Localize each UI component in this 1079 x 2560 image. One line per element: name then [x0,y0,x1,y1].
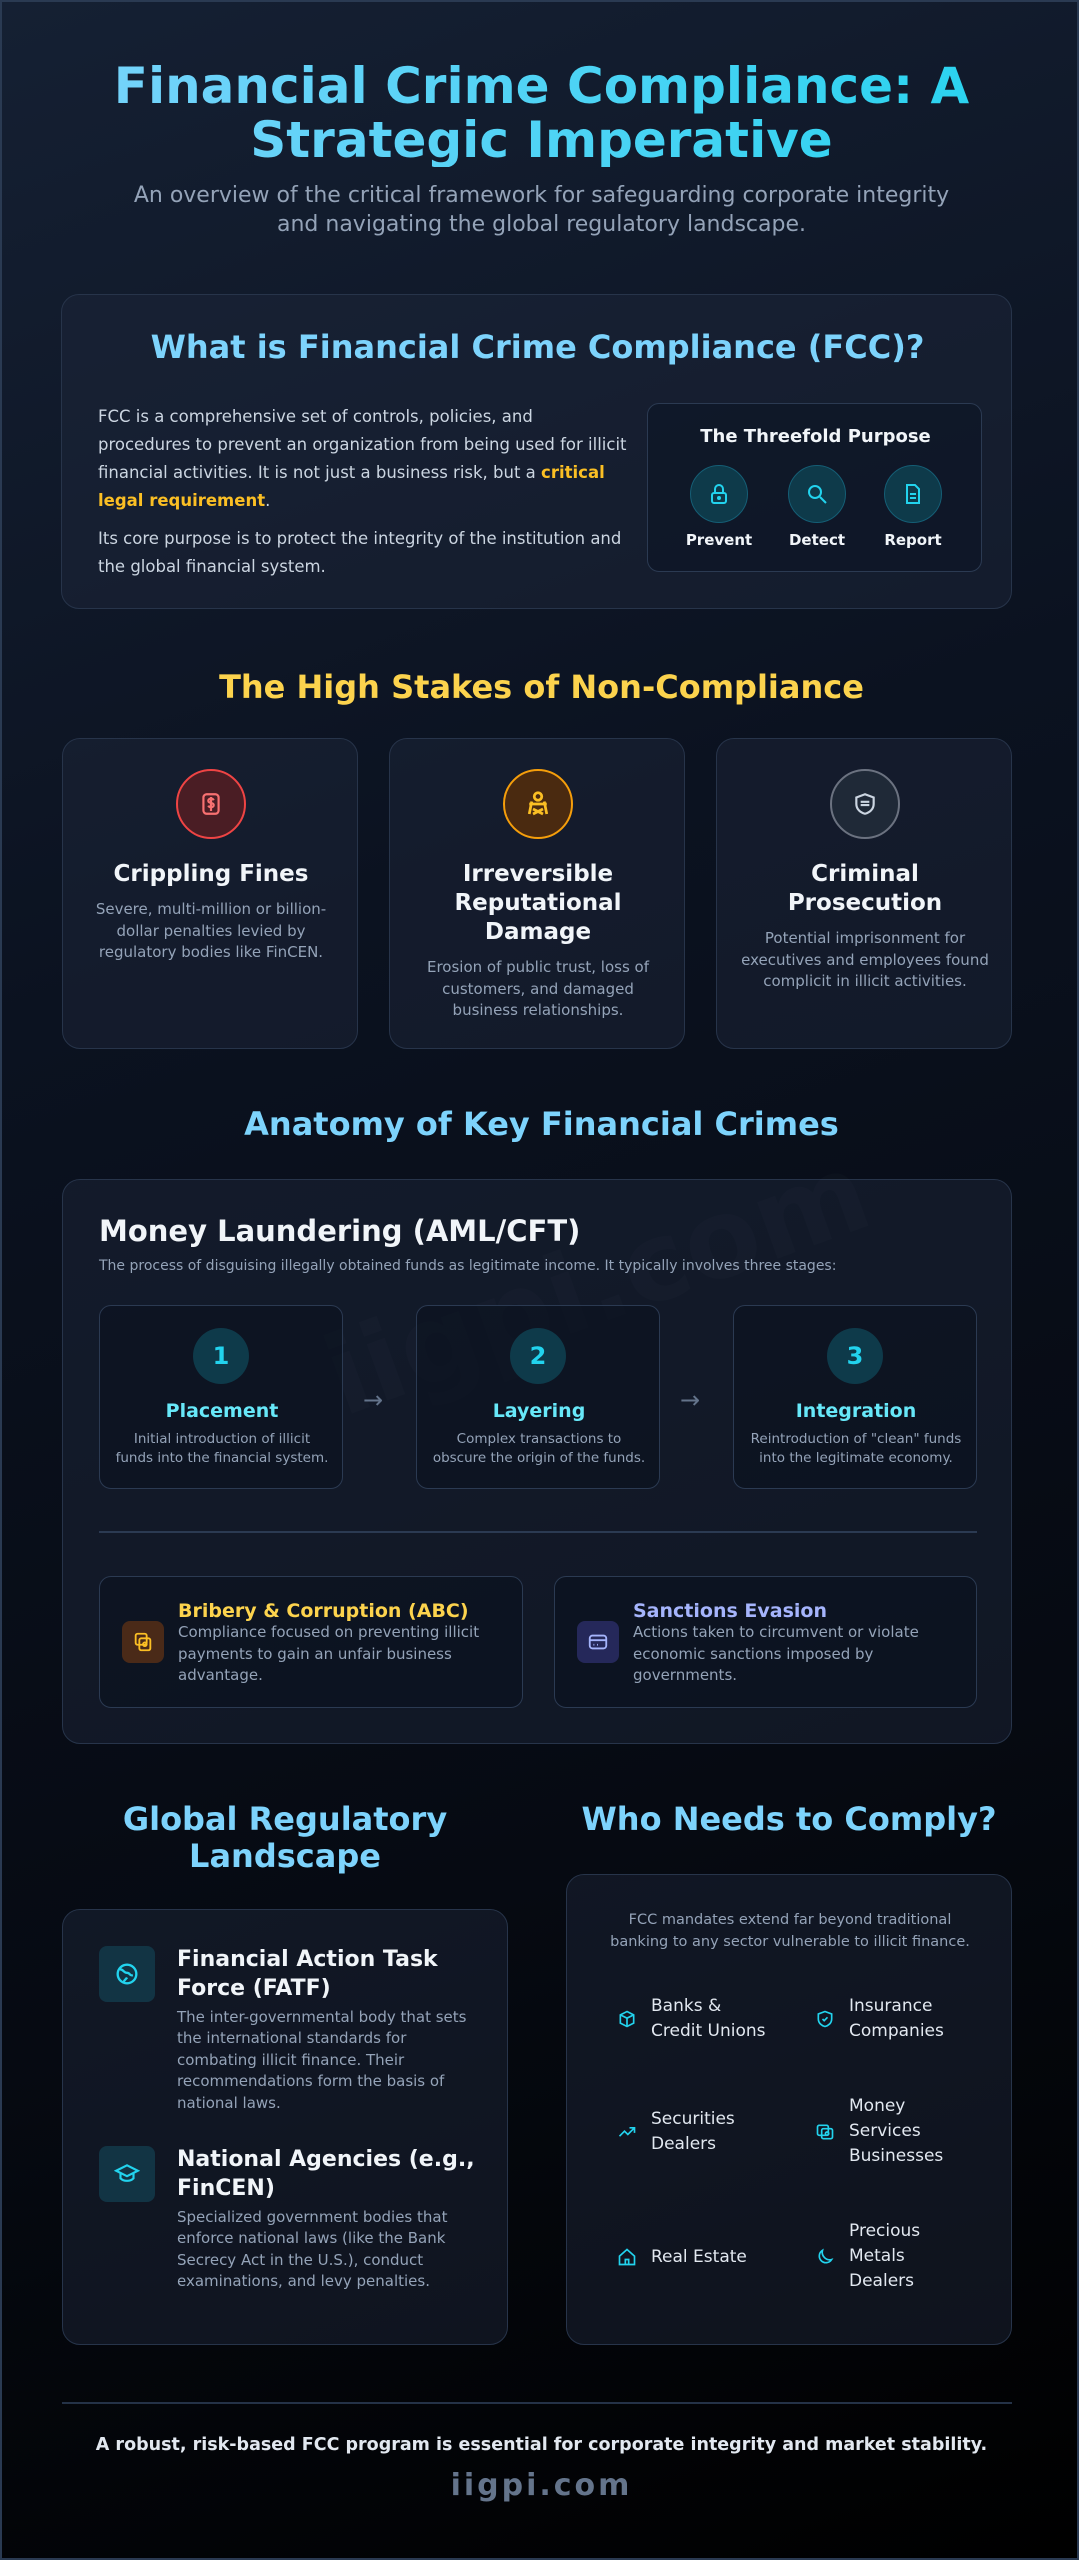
desc: Severe, multi-million or billion-dollar penalties levied by regulatory bodies like FinCEN. [96,900,326,961]
FATF text: combating illicit finance. Their [177,2051,404,2069]
heading: money laundering: Money Laundering (AML/CFT) [99,1214,580,1248]
icon: reputation [503,769,573,839]
text: definition: procedures to prevent an organization from being used for illicit [98,435,626,454]
title: Reputational [454,890,622,916]
panel: what is FCC [61,294,1012,609]
box: sanctions [554,1576,977,1708]
stage 3: Reintroduction of "clean" funds [751,1431,961,1447]
panel: anatomy [62,1179,1012,1744]
title: Financial Crime Compliance: A [114,57,969,115]
text: definition: FCC is a comprehensive set of controls, policies, and [98,407,533,426]
subtitle [134,183,949,237]
heading: high stakes: The High Stakes of Non-Compliance [219,668,864,706]
icon: national agencies [99,2146,155,2202]
icon: prosecution [830,769,900,839]
item: securities [619,2109,735,2154]
stage 1 [99,1305,343,1489]
desc: Potential imprisonment for executives and employees found complicit in illicit activities. [741,929,989,990]
agencies text: Secrecy Act in the U.S.), conduct [177,2251,423,2269]
icon: report [884,465,942,523]
title: Irreversible [463,861,613,887]
item: money services [816,2096,943,2166]
item: money services: Money [849,2096,905,2116]
intro text: FCC mandates extend far beyond traditional [629,1912,951,1928]
panel: regulators [62,1909,508,2345]
box: threefold purpose: Prevent [686,531,752,549]
heading: who needs to comply: Who Needs to Comply? [581,1800,996,1838]
stage 2: obscure the origin of the funds. [433,1450,645,1466]
item: banks [620,1996,766,2041]
item: securities: Dealers [651,2134,716,2154]
stage 1: 1 [213,1342,229,1370]
agencies text: enforce national laws (like the Bank [177,2229,445,2247]
stage 1: Placement [166,1400,278,1422]
intro text [610,1912,970,1950]
title [788,861,942,916]
title: Criminal [811,861,919,887]
title: Prosecution [788,890,942,916]
agencies text [177,2147,475,2290]
heading: global regulatory [123,1800,447,1875]
stage 1: Initial introduction of illicit [134,1431,310,1447]
item: money services: Services [849,2121,921,2141]
footer statement: A robust, risk-based FCC program is essential for corporate integrity and market stability. [96,2435,987,2455]
title: Damage [485,919,591,945]
stage 3 [733,1305,977,1489]
icon: FATF [99,1946,155,2002]
agencies text: National Agencies (e.g., [177,2147,475,2172]
icon: sanctions [577,1621,619,1663]
item: money services: Businesses [849,2146,943,2166]
stage 3: 3 [847,1342,863,1370]
text: definition: legal requirement. [98,491,270,510]
box: bribery [99,1576,523,1708]
box: sanctions: Actions taken to circumvent or violate economic sanctions imposed by governments. [633,1623,919,1684]
box: sanctions: Sanctions Evasion [633,1600,827,1622]
stage 3: Integration [796,1400,916,1422]
FATF text [176,1947,466,2112]
item: banks: Banks & [651,1996,721,2016]
stage 2: Complex transactions to [457,1431,621,1447]
box: threefold purpose [647,403,982,572]
title [2,59,1079,167]
arrow 2: → [680,1386,700,1414]
heading: global regulatory: Global Regulatory [123,1800,447,1838]
FATF text: The inter-governmental body that sets [177,2008,466,2026]
text: definition [98,407,626,576]
card: reputational damage [389,738,685,1049]
FATF text: national laws. [177,2094,281,2112]
item: precious metals [818,2221,920,2291]
heading: anatomy: Anatomy of Key Financial Crimes [244,1105,839,1143]
watermark: iigpi.com [308,1127,886,1441]
box: threefold purpose: Report [884,531,942,549]
item: insurance: Insurance [849,1996,932,2016]
icon: bribery [122,1621,164,1663]
card: criminal prosecution [716,738,1012,1049]
panel: who needs to comply [566,1874,1012,2345]
subtitle: and navigating the global regulatory landscape. [277,212,806,237]
labels [686,531,942,549]
item: insurance: Companies [849,2021,944,2041]
text: ML desc: The process of disguising illegally obtained funds as legitimate income. It typically involves three stages: [99,1258,836,1274]
FATF text: recommendations form the basis of [177,2072,444,2090]
FATF text: the international standards for [177,2029,406,2047]
FATF text: Financial Action Task [177,1947,438,1972]
heading: what is FCC: What is Financial Crime Compliance (FCC)? [151,328,924,366]
box: bribery: Compliance focused on preventing illicit payments to gain an unfair business advantage. [178,1623,479,1684]
item: precious metals: Precious [849,2221,920,2241]
title: Crippling Fines [114,861,308,887]
icon: prevent [690,465,748,523]
agencies text: FinCEN) [177,2176,275,2200]
agencies text: Specialized government bodies that [177,2208,447,2226]
icon: detect [788,465,846,523]
FATF text: Force (FATF) [177,1976,331,2000]
agencies text: examinations, and levy penalties. [177,2272,430,2290]
heading: threefold: The Threefold Purpose [700,426,931,447]
box: bribery: Bribery & Corruption (ABC) [178,1600,469,1622]
item: precious metals: Metals [849,2246,905,2266]
stage 2: Layering [493,1400,585,1422]
heading: global regulatory: Landscape [189,1837,381,1875]
arrow 1: → [363,1386,383,1414]
item: precious metals: Dealers [849,2271,914,2291]
card: crippling fines [62,738,358,1049]
text: definition: the global financial system. [98,557,326,576]
title [454,861,622,945]
item: securities: Securities [651,2109,735,2129]
item: banks: Credit Unions [651,2021,766,2041]
footer brand: iigpi.com [451,2468,632,2503]
text: definition: Its core purpose is to protect the integrity of the institution and [98,529,621,548]
subtitle: An overview of the critical framework for safeguarding corporate integrity [134,183,949,208]
item: real estate: Real Estate [651,2246,747,2266]
title: Strategic Imperative [250,111,833,169]
intro text: banking to any sector vulnerable to illicit finance. [610,1934,970,1950]
box: threefold purpose: Detect [789,531,845,549]
item: insurance [818,1996,944,2041]
stage 2: 2 [530,1342,546,1370]
stage 2 [416,1305,660,1489]
stage 3: into the legitimate economy. [759,1450,953,1466]
stage 1: funds into the financial system. [116,1450,328,1466]
text: definition: financial activities. It is not just a business risk, but a critical [98,463,605,482]
desc: Erosion of public trust, loss of customers, and damaged business relationships. [427,958,649,1019]
icon: fines [176,769,246,839]
